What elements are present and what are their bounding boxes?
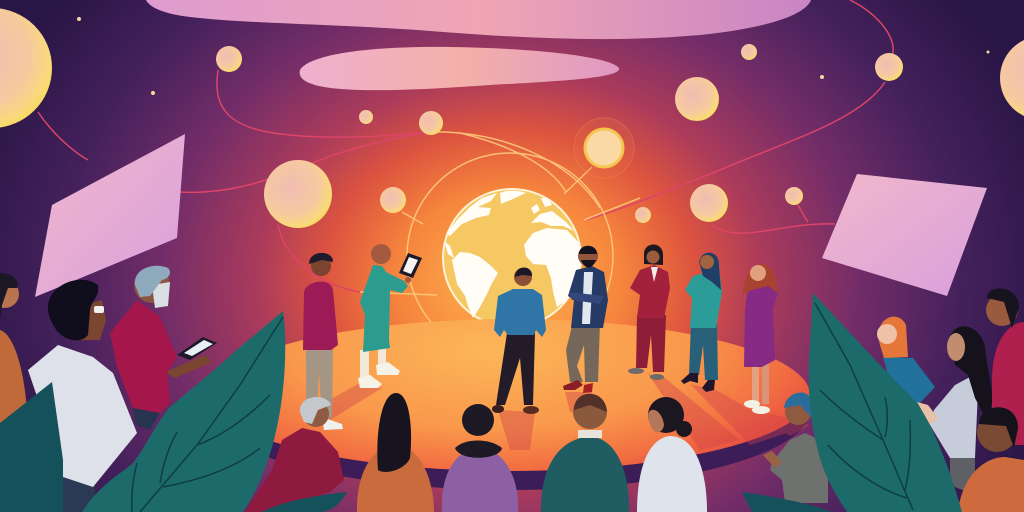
audience: woman with bun white coat (637, 397, 707, 512)
leaf: right large (809, 293, 962, 512)
person: man in blue shirt (492, 268, 546, 414)
person: seated with blue cap (763, 393, 828, 503)
person: red-haired woman with mask (877, 317, 935, 403)
person: foreground right orange shirt (958, 407, 1024, 512)
person: woman in burgundy suit (628, 244, 670, 380)
audience: hoodie person (442, 404, 518, 512)
globe (442, 188, 582, 328)
leaf: left large (82, 311, 285, 512)
person: woman in purple dress (743, 264, 778, 414)
planets and orbs (0, 8, 1024, 228)
leaf: bottom small left (262, 492, 347, 512)
person: teal coat with tablet (358, 244, 422, 388)
continents (444, 191, 582, 318)
circular stage (210, 319, 810, 490)
person: woman in teal top (681, 253, 722, 392)
middle cloud shape (300, 47, 619, 90)
person: bearded man in navy jacket (563, 246, 608, 393)
audience: long-haired woman orange (357, 393, 434, 512)
person: grey-haired man with tablet (110, 266, 217, 430)
person: seated grey hair (245, 397, 344, 512)
audience: man in teal sweater (541, 394, 629, 512)
leaf: bottom small right (742, 492, 832, 512)
person: far right man in red (986, 288, 1024, 445)
person: man in white shirt with glasses (28, 280, 137, 512)
top cloud shape (146, 0, 811, 39)
floating panel left (35, 134, 185, 297)
orbit rings and arrows around globe (360, 132, 640, 359)
person: red shirt standing (303, 253, 343, 430)
leaf: far left (0, 382, 63, 512)
floating panel right (822, 174, 987, 296)
connector lines (38, 0, 893, 292)
person: far left partial figure (0, 273, 27, 425)
person: woman with long black hair (917, 326, 992, 495)
